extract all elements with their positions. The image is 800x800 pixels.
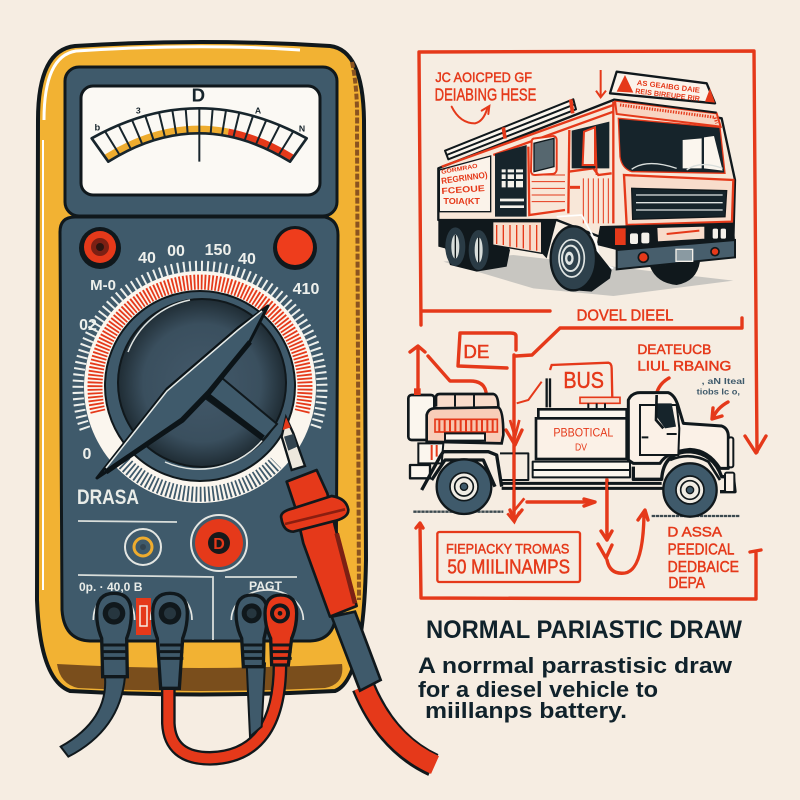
top-left note: JC AOICPED GF (435, 69, 532, 85)
top-left note (435, 69, 536, 105)
callout: 50 milliamps: 50 MIILINAMPS (447, 556, 570, 578)
top-left note: DEIABING HESE (435, 85, 536, 105)
description text (418, 653, 733, 723)
rear side panel: GORMRAO (441, 164, 479, 176)
dial numbers: 0 (83, 446, 92, 463)
label: DE: DE (463, 341, 489, 362)
red body stripes (442, 102, 613, 223)
rear side panel: TOIA(KT (443, 196, 481, 206)
windshield (618, 118, 725, 173)
socket labels: 0p. · 40,0 B (79, 580, 143, 594)
left front wheel (551, 215, 613, 292)
probe cable (363, 687, 433, 765)
beacon light bar (610, 72, 715, 103)
sockets (93, 590, 303, 688)
tank body: PBBOTICAL (553, 426, 614, 440)
probe tip (282, 417, 305, 470)
ground shadows (413, 512, 740, 516)
beacon light bar: AS GEAIBG DAIE (636, 78, 700, 95)
fire truck illustration (435, 69, 735, 324)
right-bottom note (667, 524, 739, 592)
truck body (438, 100, 735, 243)
headlight bar (597, 223, 735, 250)
front panel with grille (624, 175, 733, 225)
socket labels (79, 579, 283, 594)
display panel (65, 67, 337, 216)
multimeter body (37, 42, 366, 694)
lower hatch (493, 220, 557, 258)
front bumper (617, 240, 735, 269)
electrical truck illustration (408, 341, 745, 592)
display window (81, 86, 320, 195)
ground shadow (443, 255, 733, 296)
tank body: DV (575, 443, 587, 454)
right-top note: LIUL RBAING (637, 358, 731, 374)
top-left arrow (452, 106, 489, 123)
ladder (445, 99, 576, 159)
control panel (60, 217, 338, 641)
lower controls (78, 515, 297, 640)
chassis and fenders (410, 452, 735, 492)
analog scale (92, 85, 307, 162)
description text: for a diesel vehicle to (418, 677, 658, 702)
door handle and hatch stripes (532, 175, 608, 223)
dial numbers: 40 (138, 250, 156, 267)
equipment locker (495, 145, 527, 217)
rear side panel (439, 156, 491, 212)
rear wheel (663, 463, 717, 517)
side window (531, 136, 557, 175)
left black cable (61, 677, 125, 757)
top-right red button (273, 226, 317, 270)
top-left red jack (79, 227, 121, 269)
dial numbers: 410 (293, 281, 319, 298)
right-top note: DEATEUCB (637, 341, 711, 357)
rear side panel: FCEOUE (441, 183, 485, 196)
central red wire over chassis (507, 420, 607, 533)
dial numbers: 00 (167, 243, 185, 260)
dial numbers: 150 (205, 242, 231, 259)
button letter: D (213, 536, 225, 553)
red loop cable (168, 663, 280, 758)
roof visor (613, 99, 721, 127)
small blue note: tiobs Ic o, (697, 387, 740, 397)
dial label: DRASA (77, 486, 139, 509)
rotary dial (78, 242, 322, 503)
right-bottom note: D ASSA (667, 524, 723, 540)
analog scale: b (94, 123, 100, 133)
center black cable (247, 663, 265, 737)
dial numbers: 40 (238, 251, 256, 268)
dial numbers: 02 (79, 317, 97, 334)
description text: A norrmal parrastisic draw (418, 653, 733, 678)
rear side panel: REGRINNO) (441, 170, 488, 186)
title: NORMAL PARIASTIC DRAW (426, 616, 742, 644)
red fuse tag (136, 598, 151, 635)
rear wheels (438, 220, 510, 272)
socket labels: PAGT (249, 579, 283, 593)
tank body (536, 409, 627, 459)
analog scale: A (255, 105, 262, 115)
probe handle (287, 470, 357, 617)
right front wheel (650, 262, 700, 285)
dial numbers (79, 242, 319, 463)
analog scale: N (299, 123, 305, 133)
panel: multimeter (37, 42, 435, 765)
dial numbers: M-0 (90, 277, 116, 294)
small blue note (697, 376, 745, 397)
small blue note: , aN Iteal (702, 376, 745, 386)
callout: 50 milliamps: FIEPIACKY TROMAS (446, 540, 569, 556)
door window (572, 122, 609, 175)
right-bottom note: DEPA (668, 575, 706, 592)
truck cab (628, 393, 734, 492)
BUS box: BUS (563, 367, 604, 393)
knob pointer (97, 306, 277, 478)
right-bottom note: DEDBAICE (668, 559, 739, 576)
engine module (408, 388, 503, 463)
BUS box (517, 363, 620, 408)
panel: red diagram frame and arrows (410, 51, 766, 599)
description text: miillanps battery. (425, 698, 627, 723)
rubber bottom band (57, 664, 342, 691)
callout: 50 milliamps (437, 532, 580, 582)
scale labels: D (192, 85, 205, 106)
front wheel (437, 459, 491, 514)
right-top note (637, 341, 731, 374)
right-bottom note: PEEDICAL (668, 542, 735, 559)
beacon light bar: REIS BIREUPE RIR (635, 86, 701, 103)
down arrow (596, 70, 606, 97)
label: devel diesel: DOVEL DIEEL (577, 307, 673, 324)
test leads and sockets (61, 417, 435, 765)
analog scale: 3 (136, 105, 141, 115)
